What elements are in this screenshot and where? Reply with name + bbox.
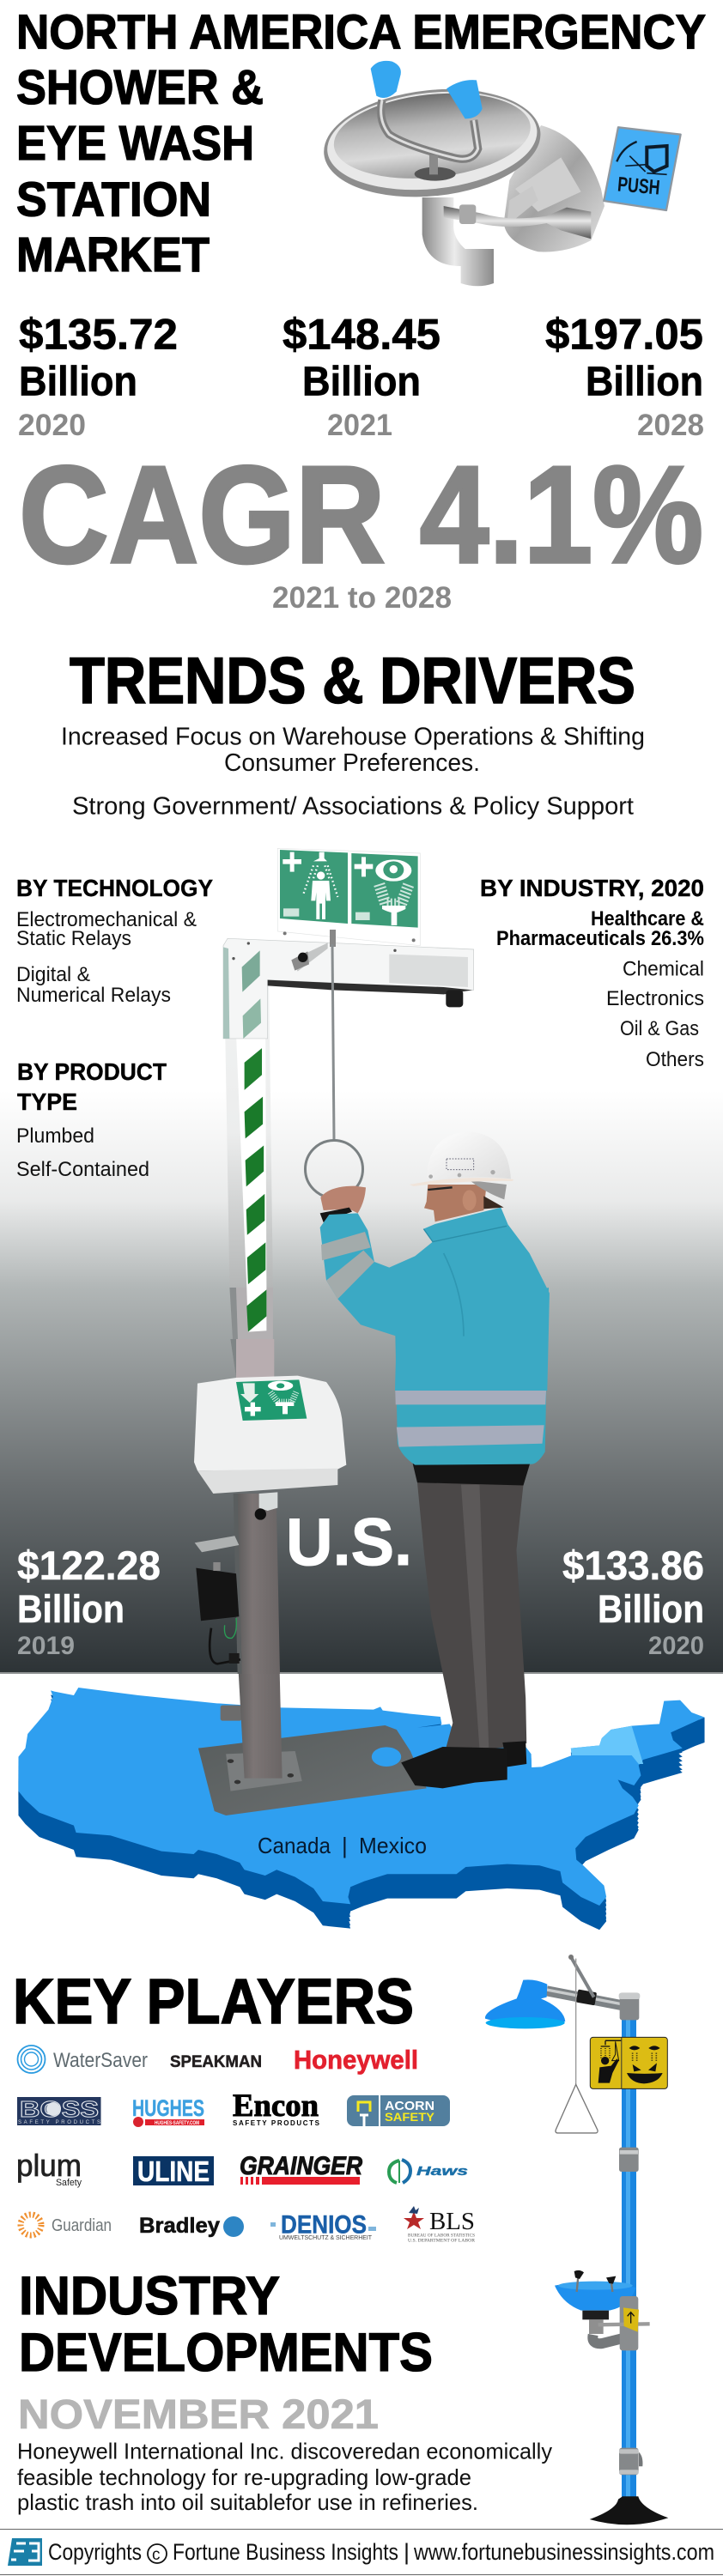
logo: Encon: SAFETY PRODUCTS <box>233 2119 320 2127</box>
market value 2028: Billion <box>586 359 703 405</box>
by technology segment: Static Relays <box>16 927 131 950</box>
logo: BLS: BLS <box>429 2208 475 2235</box>
map label: Mexico <box>359 1833 427 1858</box>
logo: Hughes: HUGHES-SAFETY.COM <box>155 2121 199 2126</box>
U.S. value 2019: 2019 <box>17 1632 75 1660</box>
base plate <box>198 1663 427 1815</box>
logo: Encon: Encon <box>233 2088 319 2124</box>
market value 2020: Billion <box>19 359 137 405</box>
by product type segment: BY PRODUCT <box>17 1058 167 1085</box>
driver text <box>61 723 645 821</box>
market value 2021: 2021 <box>327 409 392 442</box>
U.S. value 2019: Billion <box>17 1587 125 1631</box>
heading: industry developments: DEVELOPMENTS <box>19 2323 433 2383</box>
by technology segment: Digital & <box>16 963 90 986</box>
icon: blue safety shower with eye wash <box>485 1955 668 2524</box>
market value 2021: Billion <box>302 359 421 405</box>
by industry segment: Chemical <box>623 958 704 980</box>
logo: Boss: SAFETY PRODUCTS <box>18 2120 100 2125</box>
driver text: Strong Government/ Associations & Policy Support <box>72 793 634 821</box>
development text <box>17 2438 552 2515</box>
logo: Acorn Safety <box>347 2095 450 2126</box>
market value 2021 <box>283 311 440 442</box>
logo: Honeywell: Honeywell <box>294 2045 418 2075</box>
market value 2021: $148.45 <box>283 311 440 359</box>
title <box>16 5 706 282</box>
logo: Speakman: SPEAKMAN <box>170 2053 262 2071</box>
U.S. value 2020: Billion <box>598 1587 704 1631</box>
logo: BLS: BUREAU OF LABOR STATISTICS <box>408 2234 475 2239</box>
logo: Hughes <box>132 2095 204 2127</box>
by industry segment: Pharmaceuticals 26.3% <box>496 927 704 950</box>
title: STATION <box>16 172 211 227</box>
emergency shower station with worker <box>194 848 550 1815</box>
icon: copyright symbol <box>148 2544 167 2564</box>
logo: Bradley: Bradley <box>139 2214 220 2238</box>
title: EYE WASH <box>16 116 254 171</box>
U.S. value 2019: $122.28 <box>17 1543 161 1588</box>
gradient background panel <box>0 1090 723 1673</box>
development text: Honeywell International Inc. discoveredan economically <box>17 2438 552 2464</box>
by technology segment: BY TECHNOLOGY <box>16 875 213 901</box>
icon: Fortune Business Insights logo <box>8 2538 42 2566</box>
by product type segment: Self-Contained <box>16 1158 149 1181</box>
logo: Guardian: Guardian <box>52 2216 112 2235</box>
logo: Acorn Safety: SAFETY <box>385 2110 435 2124</box>
white eye wash box on post <box>194 1339 346 1674</box>
title: SHOWER & <box>16 60 264 115</box>
by technology segment <box>16 875 213 1007</box>
driver text: Consumer Preferences. <box>224 749 480 777</box>
logo: Acorn Safety: ACORN <box>385 2099 434 2113</box>
market value 2020: 2020 <box>18 409 86 442</box>
icon: eye wash fountain: PUSH <box>617 173 661 200</box>
heading: industry developments <box>19 2266 433 2383</box>
heading: industry developments: INDUSTRY <box>19 2266 280 2326</box>
logo: Boss <box>17 2096 101 2125</box>
market value 2028 <box>545 311 704 442</box>
logo: Grainger: GRAINGER <box>240 2152 362 2180</box>
logo: BLS <box>404 2206 475 2244</box>
by product type segment <box>16 1058 167 1181</box>
logo: Plum Safety: plum <box>16 2148 82 2183</box>
logo: Denios: DENIOS <box>281 2211 367 2239</box>
footer: Copyrights <box>48 2539 142 2565</box>
market value 2020: $135.72 <box>19 311 178 359</box>
by industry segment: Others <box>646 1048 704 1071</box>
footer <box>0 2529 723 2575</box>
U.S. value 2020: $133.86 <box>562 1543 704 1588</box>
market value 2020 <box>18 311 178 442</box>
driver text: Increased Focus on Warehouse Operations & Shifting <box>61 723 645 750</box>
logo: Guardian <box>21 2215 112 2235</box>
development text: feasible technology for re-upgrading low-grade <box>17 2464 471 2490</box>
logo: BLS: U.S. DEPARTMENT OF LABOR <box>408 2239 475 2244</box>
U.S. value 2019 <box>17 1543 161 1660</box>
logo: Boss: BOSS <box>20 2096 99 2122</box>
by industry segment: Healthcare & <box>591 907 704 930</box>
by industry segment: Electronics <box>606 987 704 1010</box>
heading: key players: KEY PLAYERS <box>13 1966 414 2037</box>
by product type segment: Plumbed <box>16 1124 94 1148</box>
icon: eye wash fountain <box>319 61 681 286</box>
footer: Fortune Business Insights <box>173 2539 398 2565</box>
heading: trends and drivers: TRENDS & DRIVERS <box>70 645 635 718</box>
map of the United States <box>18 1688 705 1930</box>
by industry segment: BY INDUSTRY, 2020 <box>480 875 704 901</box>
company logos <box>16 2045 475 2244</box>
market value 2028: $197.05 <box>545 311 703 359</box>
development date: NOVEMBER 2021 <box>18 2392 379 2438</box>
CAGR period: 2021 to 2028 <box>272 581 452 615</box>
logo: WaterSaver <box>17 2046 148 2073</box>
map label <box>258 1833 427 1858</box>
by technology segment: Electromechanical & <box>16 908 197 931</box>
U.S. heading: U.S. <box>286 1504 412 1579</box>
pull rod and ring <box>306 930 362 1198</box>
logo: Haws: Haws <box>416 2164 468 2179</box>
map label: Canada <box>258 1833 331 1858</box>
sign: shower and eye wash <box>277 848 420 946</box>
by industry segment: Oil & Gas <box>620 1017 699 1040</box>
by product type segment: TYPE <box>17 1088 77 1115</box>
overhead arm and column <box>223 938 474 1343</box>
footer: | <box>404 2539 410 2565</box>
development text: plastic trash into oil suitablefor use in refineries. <box>17 2489 478 2515</box>
logo: Haws <box>389 2160 468 2183</box>
U.S. value 2020: 2020 <box>648 1632 704 1660</box>
logo: Hughes: HUGHES <box>132 2095 204 2121</box>
map label: | <box>342 1833 348 1858</box>
title: MARKET <box>16 227 210 282</box>
logo: Denios: UMWELTSCHUTZ & SICHERHEIT <box>279 2235 373 2241</box>
logo: Plum Safety: Safety <box>56 2178 82 2188</box>
logo: Uline: ULINE <box>137 2155 210 2187</box>
market value 2028: 2028 <box>637 409 704 442</box>
logo: WaterSaver: WaterSaver <box>53 2049 148 2072</box>
by technology segment: Numerical Relays <box>16 984 171 1007</box>
worker <box>320 1131 550 1788</box>
by industry segment <box>480 875 704 1071</box>
U.S. value 2020 <box>562 1543 704 1660</box>
icon: copyright symbol: c <box>152 2546 160 2564</box>
